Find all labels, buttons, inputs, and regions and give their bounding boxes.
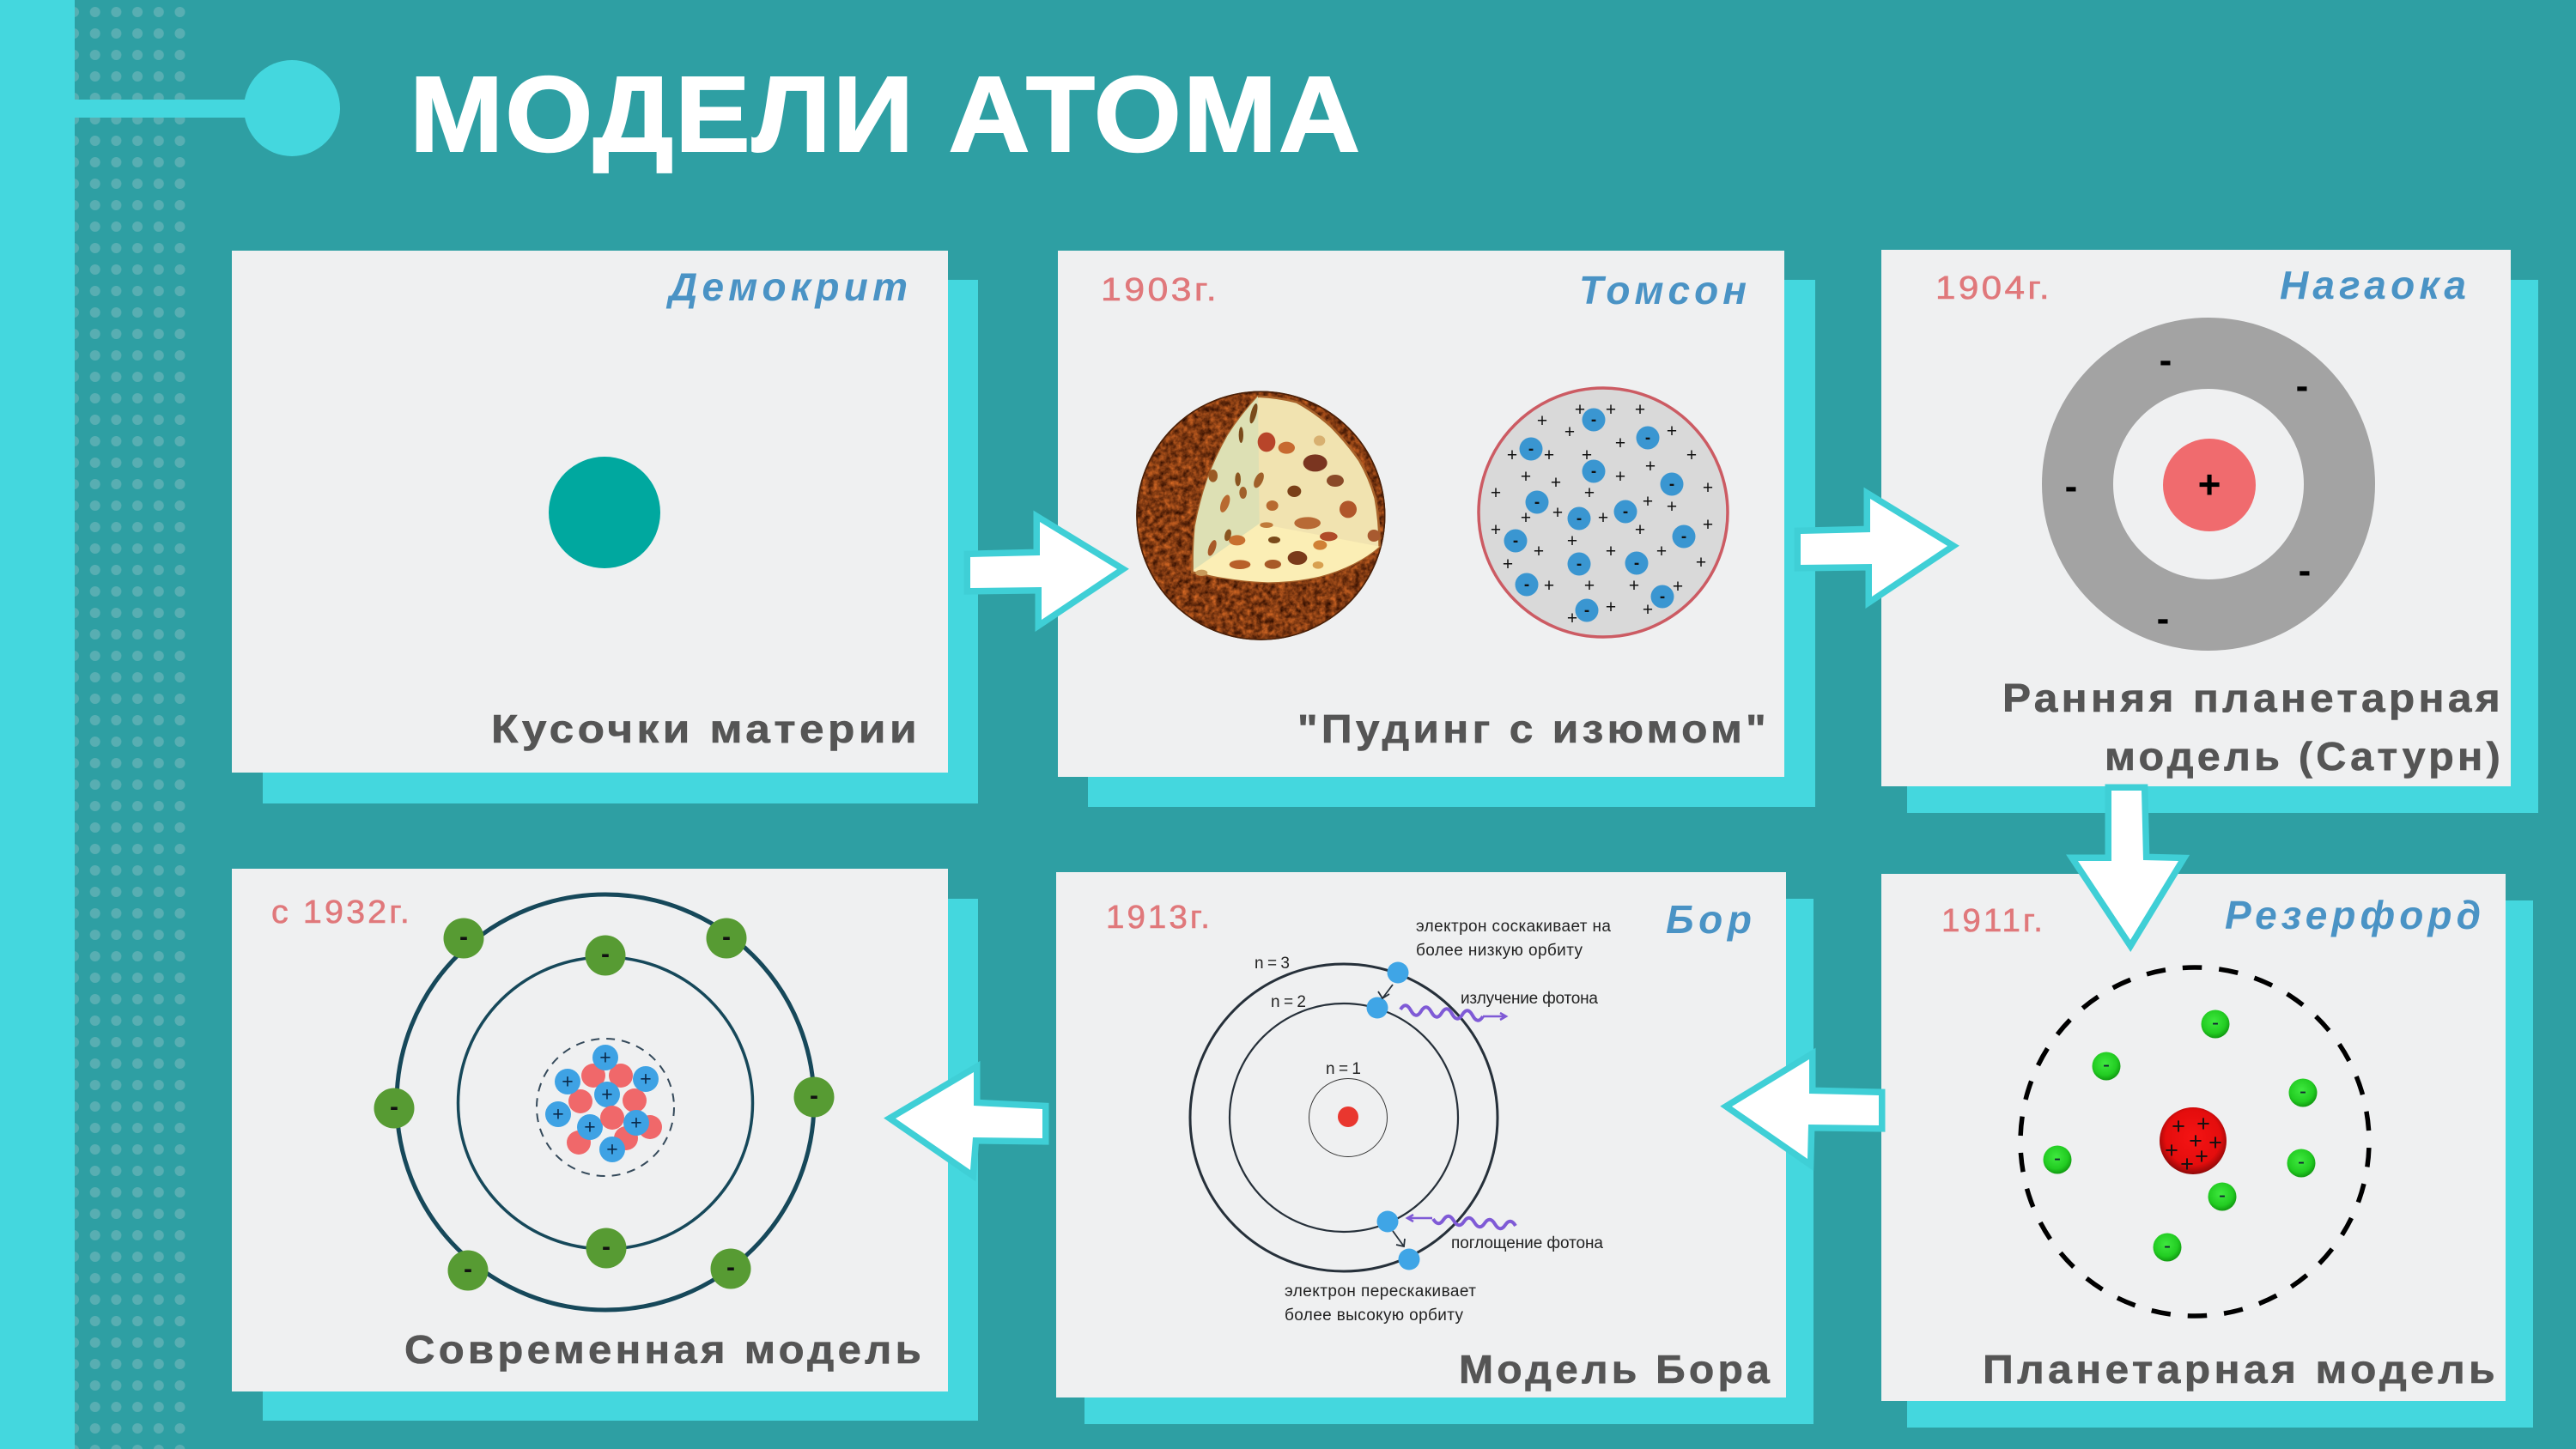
arrow: Thomson to Nagaoka	[1801, 499, 1947, 597]
panel: modern model	[232, 869, 978, 1421]
arrow: Nagaoka to Rutherford	[2078, 791, 2178, 940]
diagram: Bohr orbits: излучение фотона	[1461, 990, 1598, 1008]
diagram: Bohr orbits	[1190, 918, 1611, 1325]
caption: early planetary model: Ранняя планетарная	[2002, 676, 2504, 720]
arrow: Bohr to modern model	[896, 1072, 1042, 1170]
diagram: Saturn model: +	[2198, 462, 2221, 506]
diagram: Bohr orbits: более низкую орбиту	[1416, 942, 1583, 960]
caption: planetary model: Планетарная модель	[1983, 1347, 2499, 1391]
year 1903: 1903г.	[1101, 272, 1219, 308]
panel: Rutherford	[1881, 874, 2533, 1428]
name: Nagaoka: Нагаока	[2280, 263, 2466, 307]
caption: early planetary model	[2002, 676, 2504, 779]
title marker: line and circle	[75, 60, 340, 156]
name: Rutherford: Резерфорд	[2225, 893, 2481, 937]
diagram: planetary atom: +++++++	[2165, 1111, 2222, 1177]
diagram: Thomson atom with electrons: +++++++++++++++++++++++++++++++++++++++	[1491, 400, 1713, 628]
panel: Democritus	[232, 251, 978, 803]
panel: Bohr	[1056, 872, 1814, 1424]
diagram: Bohr orbits: более высокую орбиту	[1285, 1307, 1463, 1325]
diagram: Bohr orbits: электрон перескакивает	[1285, 1282, 1476, 1300]
year 1913: 1913г.	[1106, 900, 1212, 936]
illustration: raisin pudding cross-section	[1136, 391, 1385, 640]
year 1911: 1911г.	[1941, 903, 2045, 939]
diagram: modern atom: ++++++++	[552, 1046, 652, 1161]
caption: modern model: Современная модель	[404, 1327, 925, 1372]
dot pattern strip	[69, 0, 191, 1449]
arrow: Democritus to Thomson	[970, 522, 1117, 620]
diagram: Thomson atom with electrons: ---------------	[1513, 411, 1686, 620]
name: Thomson: Томсон	[1579, 268, 1747, 312]
diagram: Bohr orbits: поглощение фотона	[1451, 1234, 1603, 1252]
diagram: Saturn model: -----	[2065, 339, 2311, 640]
caption: Bohr model: Модель Бора	[1459, 1347, 1773, 1391]
diagram: planetary atom: -------	[2054, 1011, 2306, 1258]
panel: Thomson	[1058, 251, 1815, 807]
diagram: Bohr orbits: n = 3	[1255, 955, 1290, 973]
caption: pieces of matter: Кусочки материи	[491, 706, 920, 751]
caption: early planetary model: модель (Сатурн)	[2105, 734, 2504, 779]
caption: raisin pudding: "Пудинг с изюмом"	[1297, 706, 1770, 751]
left accent bar	[0, 0, 75, 1449]
icon: solid atom sphere	[549, 457, 660, 568]
diagram: Bohr orbits: n = 1	[1326, 1060, 1361, 1078]
name: Bohr: Бор	[1666, 897, 1752, 942]
diagram: Bohr orbits: n = 2	[1271, 993, 1306, 1011]
name: Democritus: Демокрит	[665, 264, 908, 309]
arrow: Rutherford to Bohr	[1732, 1059, 1879, 1159]
title: МОДЕЛИ АТОМА	[410, 55, 1362, 174]
year since 1932: с 1932г.	[271, 894, 412, 931]
diagram: Bohr orbits: электрон соскакивает на	[1416, 918, 1611, 936]
year 1904: 1904г.	[1935, 270, 2052, 306]
diagram: modern atom: --------	[390, 923, 818, 1283]
diagram: planetary atom	[2008, 955, 2381, 1328]
panel: Nagaoka	[1881, 250, 2538, 813]
